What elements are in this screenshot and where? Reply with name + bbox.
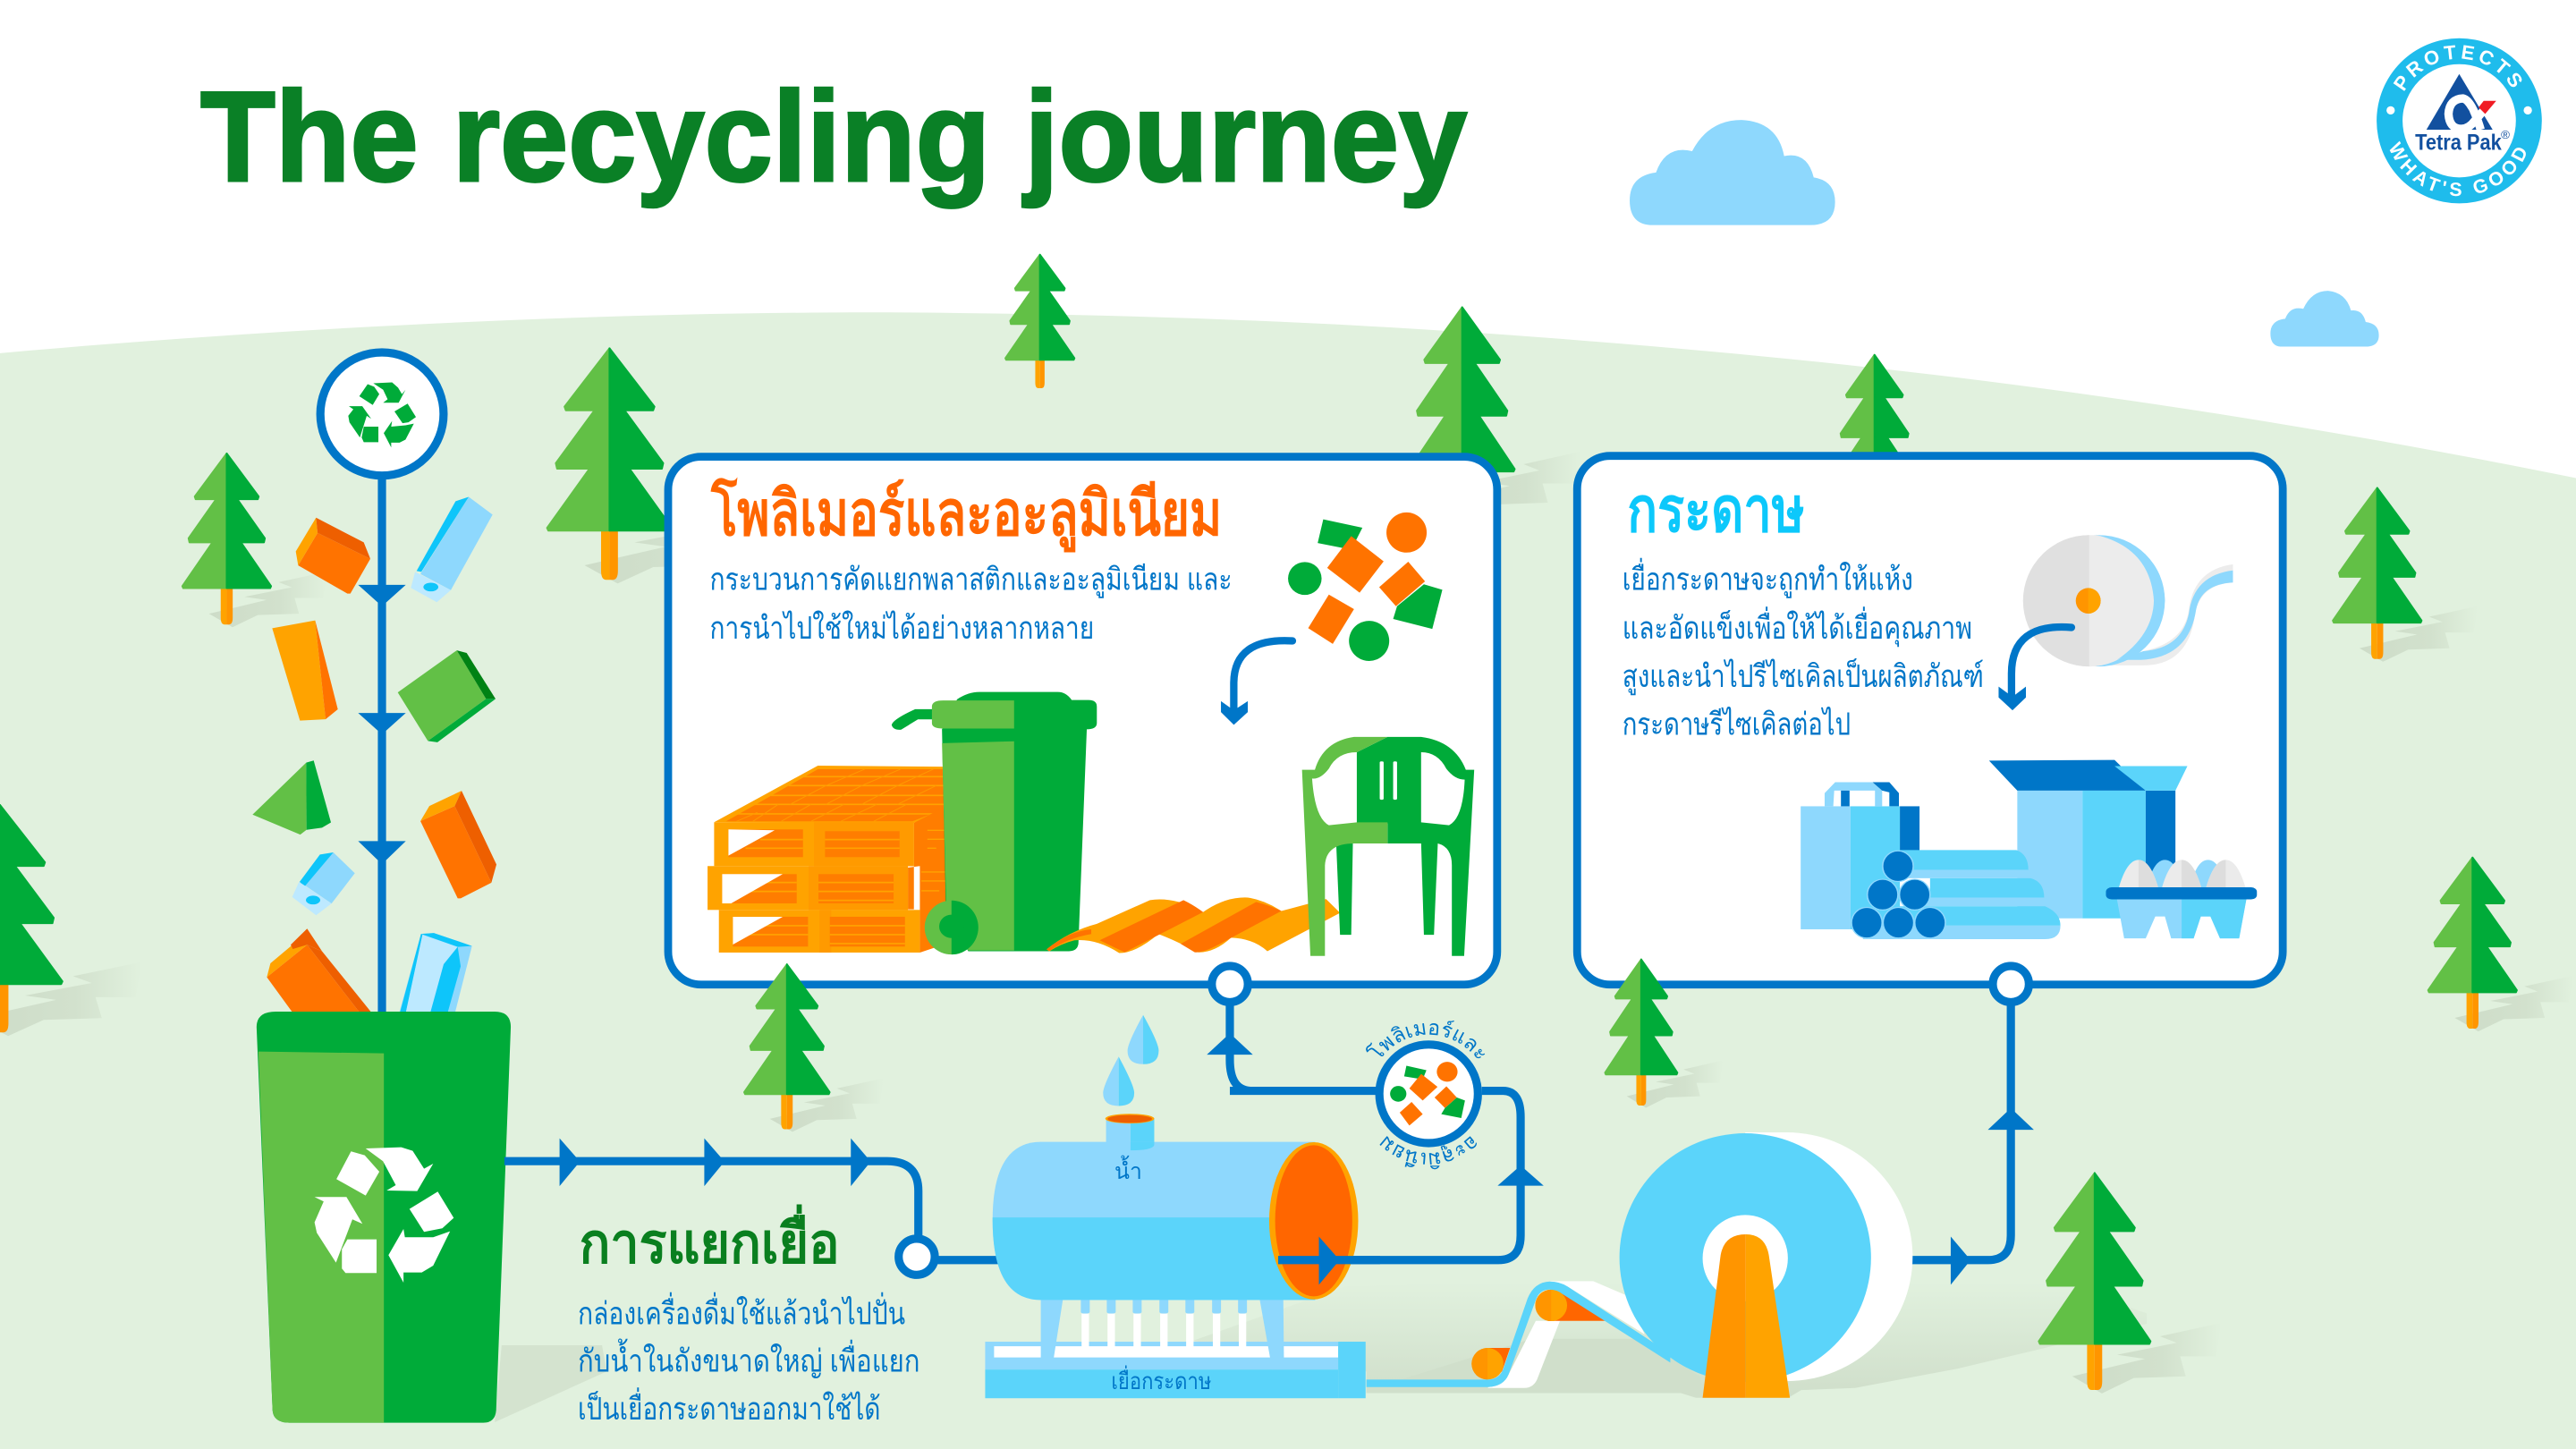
icon: corrugated roof sheet [1046, 897, 1340, 953]
flow: cartons falling to bin [252, 352, 496, 1019]
arrowhead [1998, 687, 2026, 710]
panel body text: เยื่อกระดาษจะถูกทำให้แห้ง [1623, 557, 1913, 597]
pipe: bin to tank [504, 1161, 1019, 1260]
icon: cardboard box [1989, 760, 2188, 919]
icon: shredded pieces [1288, 513, 1443, 661]
panel body text: สูงและนำไปรีไซเคิลเป็นผลิตภัณฑ์ [1623, 657, 1984, 695]
icon: green wheelie bin [892, 692, 1097, 954]
pipe: vertical flow line [358, 473, 406, 1019]
arrow [560, 1139, 580, 1186]
arrow: curved down [2012, 627, 2072, 699]
tree [1410, 307, 1581, 519]
panel body text: การนำไปใช้ใหม่ได้อย่างหลากหลาย [709, 610, 1094, 646]
machine: paper roll line [1367, 1132, 1912, 1398]
logo: Tetra Pak protects what's good: PROTECTS [2394, 45, 2522, 91]
tree [0, 805, 141, 1036]
label: water: น้ำ [1114, 1156, 1142, 1184]
text: pulp separation: เป็นเยื่อกระดาษออกมาใช้ได้ [578, 1387, 880, 1427]
tree [1835, 355, 1914, 513]
background hill [0, 312, 2576, 1449]
curved label: โพลิเมอร์และ [1366, 1021, 1485, 1059]
tree [2038, 1173, 2222, 1394]
title: The recycling journey [200, 65, 1467, 208]
roller lower [1471, 1348, 1510, 1379]
icon: paper roll [2023, 535, 2233, 666]
tree [2333, 488, 2478, 662]
arrow [851, 1139, 870, 1186]
panel: polymer and aluminium [668, 457, 1497, 985]
text: pulp separation: กล่องเครื่องดื่มใช้แล้วนำไปปั่น [578, 1292, 905, 1331]
illustration: polymer products [892, 513, 1474, 956]
tree [744, 964, 884, 1131]
tank base tray [985, 1342, 1366, 1398]
icon: paper bag [1801, 782, 1919, 929]
cloud small [2270, 291, 2379, 347]
panel: paper [1577, 456, 2283, 985]
node: recycle symbol [320, 352, 444, 476]
arrow: curved down [1233, 640, 1292, 709]
tree [547, 348, 751, 583]
inlet pipe [1106, 1119, 1154, 1150]
arrowhead [1221, 701, 1248, 724]
label: pulp: เยื่อกระดาษ [1111, 1365, 1211, 1394]
curved label: อะลูมิเนียม [1379, 1136, 1477, 1170]
roller upper [1535, 1290, 1609, 1321]
arrow [1207, 1033, 1253, 1055]
node [899, 1239, 935, 1275]
panel heading: โพลิเมอร์และอะลูมิเนียม [710, 477, 1222, 553]
ground shadows [1193, 1267, 2147, 1398]
pipe: roll to paper panel [1912, 1002, 2011, 1260]
arrow [704, 1139, 724, 1186]
water drops [1103, 1015, 1158, 1106]
cyan paper ribbon [1367, 1282, 1670, 1387]
panel body text: กระดาษรีไซเคิลต่อไป [1623, 706, 1851, 741]
node [1993, 966, 2029, 1002]
text: pulp separation [578, 1205, 920, 1427]
panel body text: กระบวนการคัดแยกพลาสติกและอะลูมิเนียม และ [709, 562, 1233, 597]
panel body text: และอัดแข็งเพื่อให้ได้เยื่อคุณภาพ [1623, 606, 1972, 647]
text: pulp separation: กับน้ำในถังขนาดใหญ่ เพื่อแยก [578, 1339, 920, 1379]
node [1212, 966, 1248, 1002]
panel heading: กระดาษ [1627, 475, 1805, 545]
panel body text [1623, 557, 1984, 741]
polymer and aluminium node [1366, 1021, 1485, 1170]
arrow [1497, 1165, 1544, 1186]
tree [182, 453, 327, 627]
roll stand [1703, 1234, 1790, 1398]
tree [1605, 960, 1724, 1108]
tank body [993, 1114, 1358, 1300]
logo: Tetra Pak protects what's good: ® [2501, 128, 2510, 141]
pipe through tank and arrow [1278, 1237, 1380, 1284]
arrow [1951, 1237, 1970, 1284]
icon: pallets [708, 766, 951, 953]
logo: Tetra Pak protects what's good: WHAT'S GOOD [2390, 141, 2526, 197]
icon: plastic chair [1302, 737, 1474, 956]
icon: egg tray [2106, 860, 2257, 938]
icon: rolled paper tubes [1852, 850, 2061, 939]
flow pipes [504, 966, 2034, 1284]
arrow [1987, 1108, 2034, 1130]
icon: pieces [1390, 1062, 1465, 1125]
text: pulp separation: การแยกเยื่อ [580, 1205, 840, 1275]
illustration: paper products [1801, 535, 2257, 939]
big paper roll [1620, 1132, 1912, 1382]
logo: Tetra Pak protects what's good [2377, 38, 2542, 204]
icon: recycle symbol [315, 1148, 453, 1283]
cloud large [1630, 120, 1835, 225]
tree [1005, 255, 1074, 388]
cartons [252, 496, 496, 1014]
tank legs and nozzles [1041, 1295, 1284, 1369]
logo: Tetra Pak protects what's good: Tetra Pak [2415, 131, 2503, 156]
machine: pulper tank [985, 1015, 1366, 1398]
white paper web [1488, 1281, 1645, 1388]
pipe: tank to polymer node to panel [1230, 1002, 1521, 1260]
large recycling bin [257, 1012, 606, 1423]
panel body text [709, 562, 1233, 646]
tree [2428, 858, 2573, 1031]
